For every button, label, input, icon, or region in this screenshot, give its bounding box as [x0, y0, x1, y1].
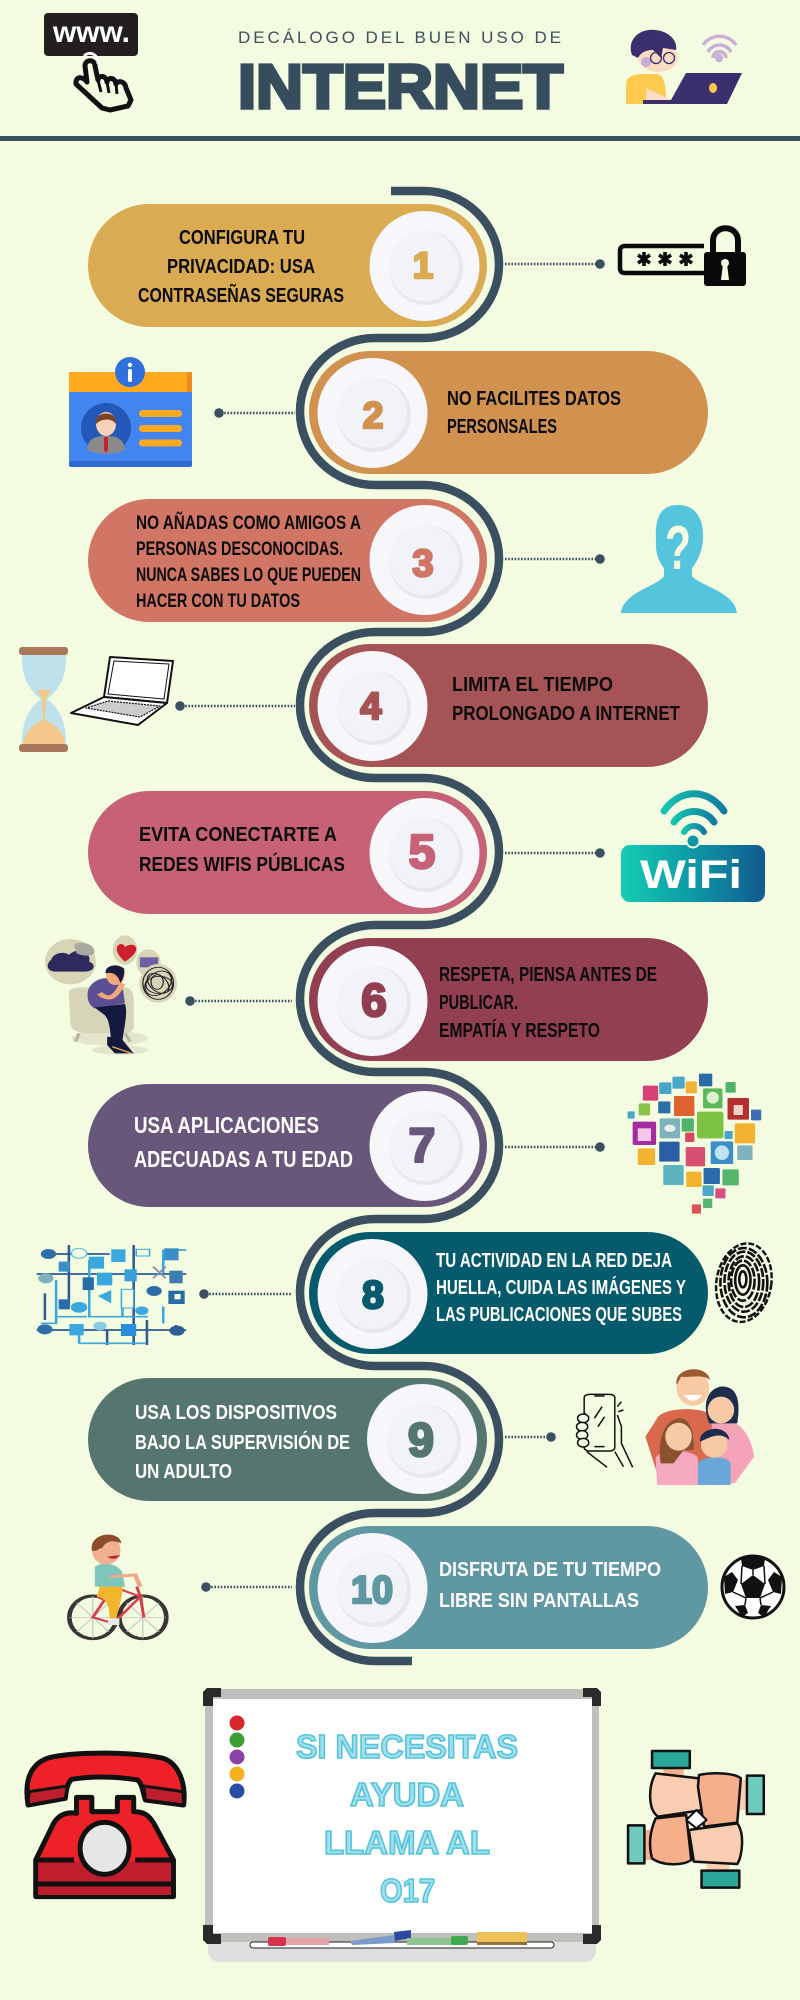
board message: AYUDA — [350, 1776, 464, 1813]
tray shadow — [208, 1925, 596, 1962]
number 2: 2 — [363, 395, 383, 436]
serpentine line — [300, 191, 499, 1661]
icon: wifi sign: WiFi — [640, 853, 742, 897]
text 1 — [138, 226, 344, 307]
disc 8 — [318, 1239, 428, 1349]
number 9: 9 — [408, 1413, 434, 1466]
title: main: INTERNET — [238, 53, 563, 122]
disc 6 — [318, 946, 428, 1056]
board message: LLAMA AL — [324, 1824, 490, 1861]
text 3 — [136, 512, 361, 612]
whiteboard — [203, 1688, 601, 1962]
icon: family — [645, 1369, 754, 1485]
board frame — [205, 1689, 599, 1942]
text 5 — [139, 823, 345, 876]
number 1: 1 — [413, 245, 433, 286]
connector 3 — [505, 554, 605, 564]
text 7 — [134, 1112, 353, 1172]
text 4: LIMITA EL TIEMPO — [452, 673, 613, 696]
text 10 — [439, 1558, 661, 1612]
board message: O17 — [380, 1872, 435, 1909]
number 3: 3 — [412, 543, 434, 585]
step 5 — [88, 791, 765, 914]
step 7 — [88, 1074, 761, 1214]
step 1 — [88, 204, 746, 327]
connector 2 — [214, 408, 295, 418]
connector 7 — [505, 1142, 605, 1152]
text 1: CONTRASEÑAS SEGURAS — [138, 284, 344, 307]
connector 1 — [505, 259, 605, 269]
number 5: 5 — [409, 826, 435, 879]
icon: laptop outline — [71, 657, 173, 725]
text 7: USA APLICACIONES — [134, 1112, 319, 1138]
text 8: LAS PUBLICACIONES QUE SUBES — [436, 1303, 682, 1326]
frame corners — [203, 1688, 601, 1944]
disc 7 — [370, 1091, 480, 1201]
icon: worried person — [45, 935, 177, 1055]
icon: www click: www. — [52, 16, 130, 49]
text 1: PRIVACIDAD: USA — [167, 255, 315, 278]
magnets — [230, 1716, 244, 1798]
number 7: 7 — [409, 1120, 435, 1173]
text 6 — [439, 963, 657, 1042]
disc 4 — [318, 651, 428, 761]
connector 8 — [199, 1289, 292, 1299]
text 3: NUNCA SABES LO QUE PUEDEN — [136, 565, 361, 586]
icon: red telephone — [27, 1753, 184, 1897]
text 3: NO AÑADAS COMO AMIGOS A — [136, 512, 361, 534]
text 4: PROLONGADO A INTERNET — [452, 702, 680, 725]
divider — [0, 136, 800, 141]
step 10 — [69, 1526, 784, 1649]
pill 5 — [88, 791, 487, 914]
icon: unknown person: ? — [665, 514, 691, 583]
footer — [27, 1688, 764, 1962]
step 4 — [19, 644, 708, 767]
icon: fingerprint — [712, 1242, 776, 1323]
text 1: CONFIGURA TU — [179, 226, 305, 249]
tray ledge — [250, 1942, 554, 1948]
text 2 — [447, 387, 621, 438]
pill 7 — [88, 1084, 487, 1207]
step 6 — [45, 935, 708, 1061]
text 10: DISFRUTA DE TU TIEMPO — [439, 1558, 661, 1581]
connector 5 — [505, 848, 605, 858]
pill 8 — [309, 1232, 708, 1354]
icon: child with laptop — [626, 30, 742, 104]
title: small line: DECÁLOGO DEL BUEN USO DE — [238, 28, 561, 47]
pill 3 — [88, 499, 487, 622]
connector 6 — [185, 996, 292, 1006]
header — [0, 13, 800, 141]
text 9: UN ADULTO — [135, 1460, 232, 1483]
text 2: PERSONSALES — [447, 415, 557, 438]
icon: hourglass — [19, 647, 68, 752]
disc 5 — [370, 798, 480, 908]
pill 2 — [309, 351, 708, 474]
disc 3 — [370, 505, 480, 615]
icon: joined hands — [628, 1751, 764, 1888]
text 6: PUBLICAR. — [439, 991, 518, 1014]
icon: www click — [44, 13, 138, 110]
icon: social network diagram — [37, 1245, 186, 1345]
disc 9 — [367, 1384, 477, 1494]
pill 6 — [309, 938, 708, 1061]
step 3 — [88, 499, 737, 622]
connector 10 — [201, 1582, 292, 1592]
text 5: EVITA CONECTARTE A — [139, 823, 337, 846]
number 4: 4 — [360, 686, 382, 728]
number 10: 10 — [351, 1569, 393, 1612]
text 8: HUELLA, CUIDA LAS IMÁGENES Y — [436, 1276, 686, 1299]
text 10: LIBRE SIN PANTALLAS — [439, 1589, 639, 1612]
disc 1 — [370, 211, 480, 321]
pill 1 — [88, 204, 487, 327]
text 3: PERSONAS DESCONOCIDAS. — [136, 539, 343, 560]
board message — [296, 1728, 518, 1909]
icon: football — [722, 1556, 784, 1618]
text 8 — [436, 1249, 686, 1326]
icon: unknown person — [621, 505, 737, 613]
text 5: REDES WIFIS PÚBLICAS — [139, 852, 345, 876]
icon: child on bicycle — [69, 1535, 166, 1639]
step 2 — [69, 351, 708, 474]
connector 4 — [175, 701, 295, 711]
number 6: 6 — [361, 974, 387, 1026]
text 9: USA LOS DISPOSITIVOS — [135, 1401, 337, 1424]
text 4 — [452, 673, 680, 725]
step 8 — [37, 1232, 776, 1354]
icon: cloud of apps — [628, 1074, 761, 1214]
disc 10 — [318, 1533, 428, 1643]
board surface — [213, 1699, 592, 1933]
disc 2 — [318, 358, 428, 468]
board message: SI NECESITAS — [296, 1728, 518, 1765]
icon: wifi sign — [621, 794, 765, 902]
connector 9 — [505, 1432, 556, 1442]
text 6: EMPATÍA Y RESPETO — [439, 1019, 600, 1042]
pill 4 — [309, 644, 708, 767]
text 9 — [135, 1401, 350, 1483]
icon: hand with phone — [577, 1394, 633, 1467]
number 8: 8 — [362, 1274, 384, 1317]
icon: password and padlock — [620, 228, 746, 286]
text 8: TU ACTIVIDAD EN LA RED DEJA — [436, 1249, 672, 1272]
markers and sponge — [268, 1930, 527, 1946]
step 9 — [88, 1369, 754, 1501]
pill 9 — [88, 1378, 487, 1501]
text 9: BAJO LA SUPERVISIÓN DE — [135, 1430, 350, 1454]
text 3: HACER CON TU DATOS — [136, 591, 300, 612]
icon: ID card — [69, 357, 192, 467]
text 2: NO FACILITES DATOS — [447, 387, 621, 410]
text 7: ADECUADAS A TU EDAD — [134, 1146, 353, 1172]
pill 10 — [309, 1526, 708, 1649]
text 6: RESPETA, PIENSA ANTES DE — [439, 963, 657, 986]
